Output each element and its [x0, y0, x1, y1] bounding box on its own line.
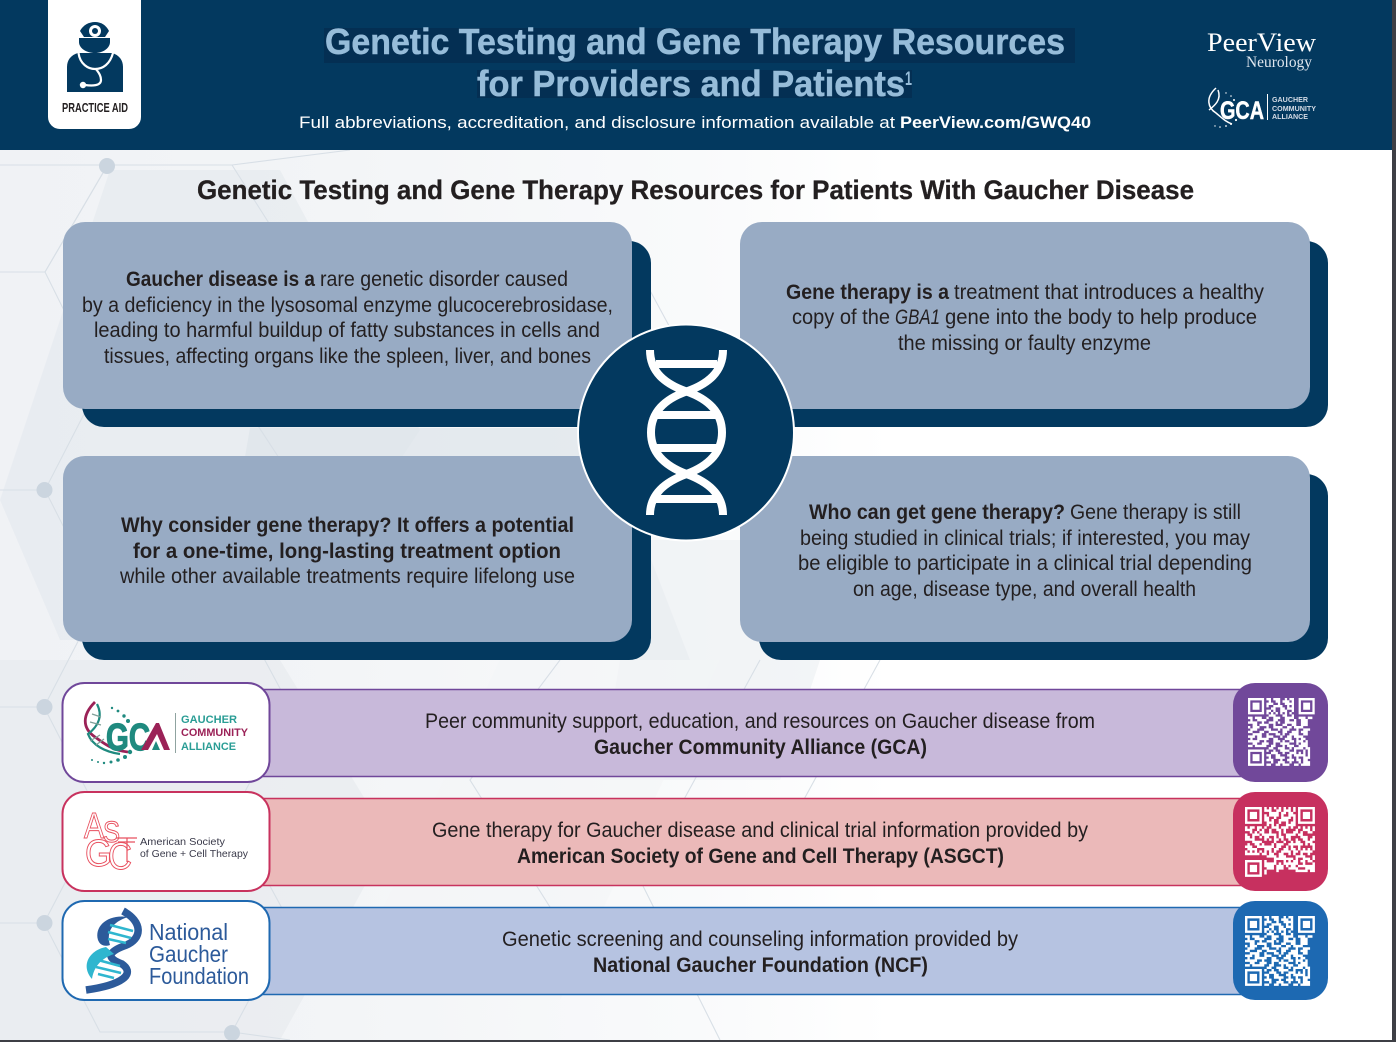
- subtitle: [299, 113, 1091, 132]
- title: [324, 21, 1075, 104]
- title: 1: [905, 69, 912, 90]
- text: ASGCT resource description: Gene therapy for Gaucher disease and clinical trial information provided by: [432, 819, 1088, 842]
- text: gene therapy definition: Gene therapy is a: [786, 281, 949, 304]
- text: why consider gene therapy: Why consider gene therapy? It offers a potential: [121, 514, 574, 537]
- text: who can get gene therapy: Who can get gene therapy?: [809, 501, 1065, 524]
- logo: PeerView Neurology: [1207, 28, 1316, 71]
- logo: PeerView Neurology: PeerView: [1207, 28, 1316, 57]
- text: who can get gene therapy: be eligible to participate in a clinical trial depending: [798, 552, 1252, 575]
- icon: central DNA circle: [578, 324, 794, 540]
- logo: PeerView Neurology: Neurology: [1246, 54, 1312, 71]
- text: why consider gene therapy: [119, 514, 575, 588]
- logo card: National Gaucher Foundation: [62, 901, 270, 1000]
- text: gene therapy definition: copy of the: [792, 306, 890, 329]
- logo: Gaucher Community Alliance white: ALLIANCE: [1272, 112, 1308, 121]
- logo card: GCA: GAUCHER: [181, 714, 237, 726]
- logo card: GCA: [62, 683, 270, 782]
- text: why consider gene therapy: while other available treatments require lifelong use: [119, 565, 575, 588]
- title: Genetic Testing and Gene Therapy Resources: [325, 21, 1065, 62]
- text: NCF resource description: National Gaucher Foundation (NCF): [593, 954, 928, 977]
- logo card: GCA: COMMUNITY: [181, 727, 249, 739]
- text: GCA resource description: [425, 710, 1095, 759]
- panel: what is gene therapy: [740, 222, 1328, 427]
- text: NCF resource description: Genetic screening and counseling information provided by: [502, 928, 1018, 951]
- text: Gaucher disease definition: leading to harmful buildup of fatty substances in cells and: [94, 319, 600, 342]
- text: Gaucher disease definition: tissues, affecting organs like the spleen, liver, and bones: [104, 345, 591, 368]
- logo card: GCA: GC: [106, 717, 150, 759]
- text: Gaucher disease definition: by a deficiency in the lysosomal enzyme glucocerebrosidase,: [82, 294, 613, 317]
- text: gene therapy definition: treatment that introduces a healthy: [954, 281, 1264, 304]
- panel: who can get gene therapy: [740, 456, 1328, 660]
- logo card: National Gaucher Foundation: Foundation: [149, 963, 249, 989]
- logo card: National Gaucher Foundation: National: [149, 919, 228, 945]
- logo card: National Gaucher Foundation: Gaucher: [149, 941, 228, 967]
- logo card: GCA: ALLIANCE: [181, 741, 236, 753]
- logo card: ASGCT: C: [108, 836, 132, 878]
- text: who can get gene therapy: on age, disease type, and overall health: [853, 578, 1196, 601]
- panel: what is Gaucher disease: [63, 222, 651, 427]
- text: GCA resource description: Gaucher Community Alliance (GCA): [594, 736, 927, 759]
- main heading: Genetic Testing and Gene Therapy Resources for Patients With Gaucher Disease: [197, 175, 1194, 205]
- logo card: ASGCT: A: [84, 805, 104, 846]
- subtitle: Full abbreviations, accreditation, and disclosure information available at: [299, 113, 895, 132]
- text: gene therapy definition: [786, 281, 1264, 355]
- subtitle: PeerView.com/GWQ40: [900, 113, 1091, 132]
- title: for Providers and Patients: [477, 63, 905, 104]
- QR tile: NCF: [1233, 901, 1328, 1000]
- resource row: American Society of Gene and Cell Therapy: [62, 792, 1328, 891]
- text: ASGCT resource description: [432, 819, 1088, 868]
- QR tile: GCA: [1233, 683, 1328, 782]
- text: who can get gene therapy: Gene therapy is still: [1070, 501, 1241, 524]
- logo: Gaucher Community Alliance white: GAUCHER: [1272, 95, 1309, 104]
- header banner: [0, 0, 1392, 150]
- text: gene therapy definition: GBA1: [895, 306, 940, 329]
- text: Gaucher disease definition: [82, 268, 613, 368]
- text: why consider gene therapy: for a one-time, long-lasting treatment option: [133, 540, 561, 563]
- text: NCF resource description: [502, 928, 1018, 977]
- text: Gaucher disease definition: Gaucher disease is a: [126, 268, 315, 291]
- logo: Gaucher Community Alliance white: COMMUNITY: [1272, 104, 1316, 113]
- logo card: ASGCT: American Society: [140, 836, 226, 848]
- panel: why consider gene therapy: [63, 456, 651, 660]
- text: ASGCT resource description: American Society of Gene and Cell Therapy (ASGCT): [517, 845, 1004, 868]
- text: GCA resource description: Peer community support, education, and resources on Gaucher disease from: [425, 710, 1095, 733]
- logo: Gaucher Community Alliance white: GCA: [1220, 97, 1264, 125]
- text: gene therapy definition: gene into the body to help produce: [945, 306, 1257, 329]
- text: who can get gene therapy: [798, 501, 1252, 601]
- text: Gaucher disease definition: rare genetic disorder caused: [320, 268, 568, 291]
- logo card: ASGCT: [62, 792, 270, 891]
- icon: doctor with stethoscope: [67, 22, 123, 92]
- QR tile: ASGCT: [1233, 792, 1328, 891]
- text: gene therapy definition: the missing or faulty enzyme: [898, 332, 1151, 355]
- badge: practice aid: [48, 0, 141, 129]
- badge label: PRACTICE AID: [62, 100, 128, 115]
- logo: Gaucher Community Alliance white: [1209, 88, 1316, 128]
- resource row: National Gaucher Foundation: [62, 901, 1328, 1000]
- logo card: ASGCT: of Gene + Cell Therapy: [140, 848, 249, 860]
- logo card: ASGCT: G: [85, 833, 112, 875]
- text: who can get gene therapy: being studied in clinical trials; if interested, you may: [800, 527, 1250, 550]
- logo card: ASGCT: S: [103, 816, 120, 849]
- resource row: Gaucher Community Alliance: [62, 683, 1328, 782]
